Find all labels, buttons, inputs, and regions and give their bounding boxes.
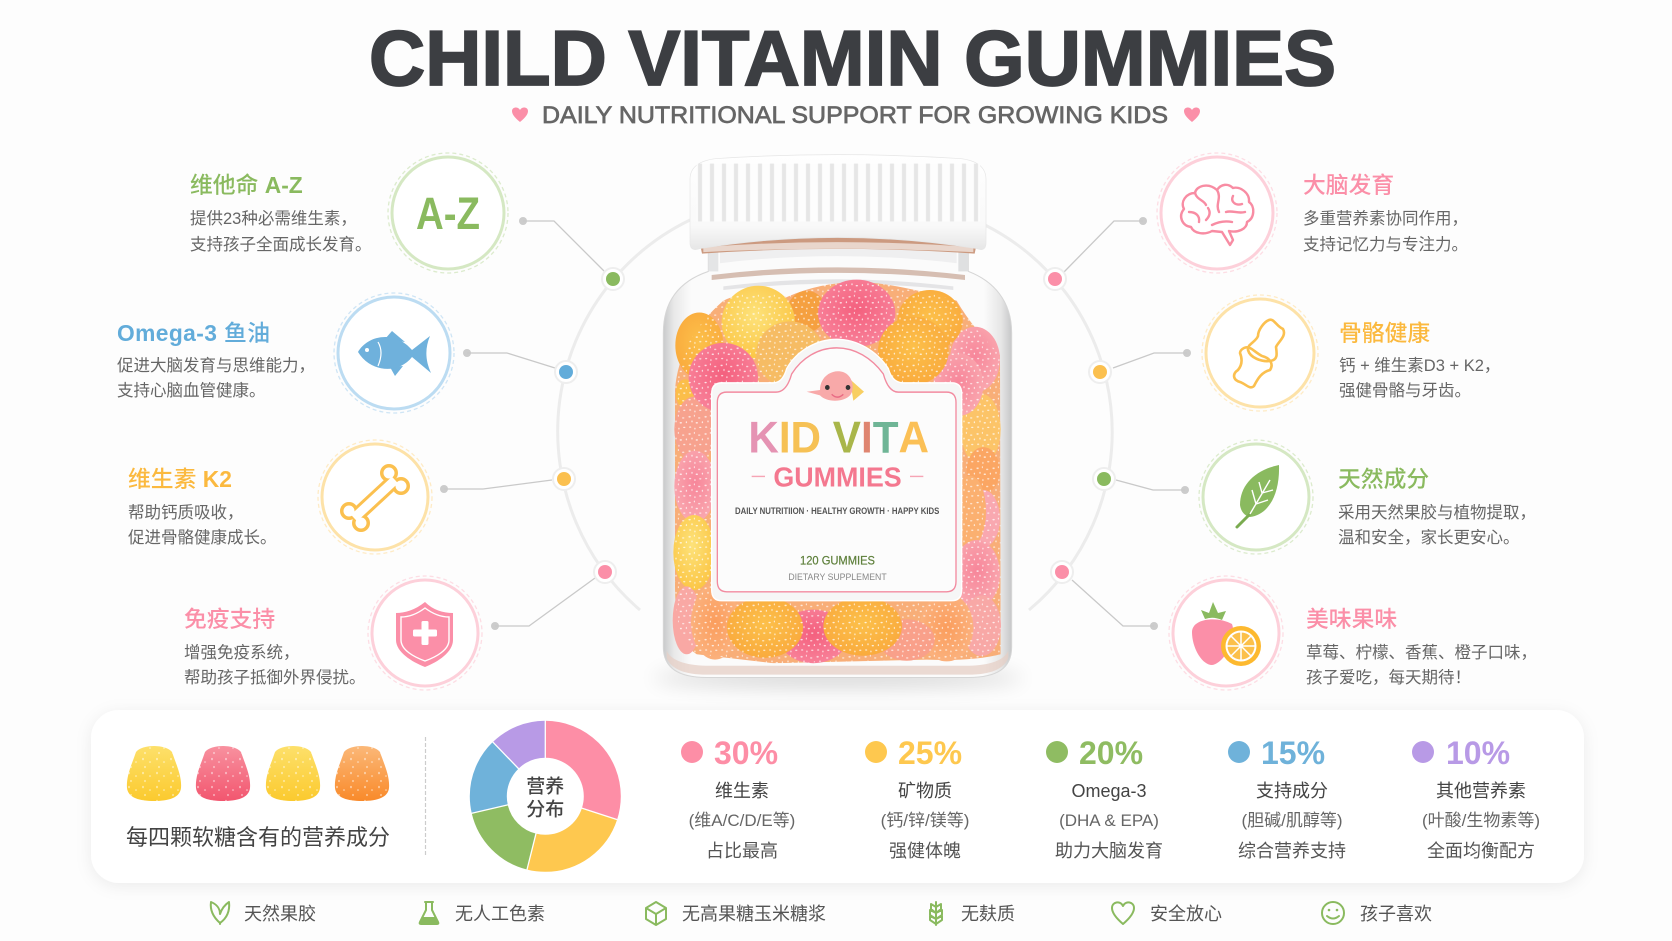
badge	[388, 153, 508, 273]
badge	[1199, 440, 1313, 554]
icon: bone	[340, 464, 410, 532]
badge: safe: 安全放心	[1150, 904, 1222, 924]
description: 孩子爱吃，每天期待！	[1306, 668, 1471, 687]
badge: gluten free	[930, 902, 1015, 925]
description: 采用天然果胶与植物提取，	[1338, 503, 1536, 522]
description: 增强免疫系统，	[184, 643, 300, 662]
badge: safe	[1112, 902, 1222, 924]
icon: strawberry and orange	[1192, 602, 1261, 666]
description: 支持心脑血管健康。	[117, 381, 266, 400]
badge	[334, 293, 454, 413]
feature: immune support	[184, 561, 616, 690]
stat: 10% other	[1412, 735, 1540, 861]
badge: no artificial colours	[420, 902, 545, 924]
stat: 25% minerals	[865, 735, 969, 861]
description	[1339, 356, 1500, 400]
badge: natural pectin: 天然果胶	[244, 904, 316, 924]
description: 温和安全，家长更安心。	[1338, 528, 1520, 547]
label tagline: DAILY NUTRITIION · HEALTHY GROWTH · HAPPY KIDS	[735, 506, 939, 516]
stat: 10% other: 其他营养素	[1436, 781, 1526, 801]
label count: 120 GUMMIES	[800, 554, 875, 568]
stat: 25% minerals: 矿物质	[898, 781, 952, 801]
label supplement: DIETARY SUPPLEMENT	[788, 572, 887, 582]
stat: 20% omega-3: (DHA & EPA)	[1059, 811, 1159, 830]
stat: 30% vitamins: 维生素	[715, 781, 769, 801]
donut chart: 分布	[526, 798, 564, 820]
left arc	[558, 220, 690, 610]
heading: 维生素 K2	[128, 466, 232, 492]
label brand name: KID VITA	[748, 413, 929, 463]
stat: 30% vitamins	[681, 735, 795, 861]
badge: gluten free: 无麸质	[961, 904, 1015, 924]
connector	[1051, 561, 1158, 630]
jar illustration	[663, 155, 1012, 677]
badge: kids love it	[1322, 902, 1432, 924]
description: 支持记忆力与专注力。	[1303, 235, 1468, 254]
stat: 25% minerals: 25%	[898, 735, 962, 771]
icon: leaf	[1237, 465, 1279, 527]
description	[117, 356, 315, 400]
badge: no high fructose corn syrup: 无高果糖玉米糖浆	[682, 904, 826, 924]
jar shadow	[653, 669, 1023, 687]
caption: 每四颗软糖含有的营养成分	[126, 825, 390, 850]
donut chart: 营养	[526, 775, 564, 797]
gummies inside jar	[673, 279, 1002, 665]
right arc	[985, 225, 1112, 610]
stat: 20% omega-3: 助力大脑发育	[1055, 841, 1163, 861]
badge	[1202, 295, 1318, 411]
description	[1338, 503, 1536, 547]
description: 强健骨骼与牙齿。	[1339, 381, 1471, 400]
four gummies	[127, 746, 389, 801]
stat: 25% minerals: 强健体魄	[889, 841, 961, 861]
label	[712, 339, 962, 601]
label gummies: GUMMIES	[773, 462, 902, 493]
stat: 10% other: 10%	[1446, 735, 1510, 771]
badge: no artificial colours: 无人工色素	[455, 904, 545, 924]
description	[1306, 643, 1537, 687]
badge: no high fructose corn syrup	[646, 902, 826, 925]
stat: 30% vitamins: 占比最高	[706, 841, 778, 861]
description: 帮助孩子抵御外界侵扰。	[184, 668, 366, 687]
stat: 15% support	[1228, 735, 1346, 861]
stat: 20% omega-3	[1046, 735, 1163, 861]
title: CHILD VITAMIN GUMMIES	[369, 14, 1336, 102]
panel: nutrition distribution	[91, 710, 1584, 883]
connector	[1093, 468, 1189, 494]
heading: 天然成分	[1338, 466, 1429, 492]
connector	[463, 349, 577, 383]
heading: 大脑发育	[1303, 172, 1394, 198]
icon: shield	[396, 602, 453, 667]
description	[1303, 209, 1468, 254]
jar base reflection	[667, 651, 1008, 675]
badge: kids love it: 孩子喜欢	[1360, 904, 1432, 924]
stat: 10% other: 全面均衡配方	[1427, 841, 1535, 861]
description: 支持孩子全面成长发育。	[190, 235, 372, 254]
heading: 免疫支持	[184, 606, 275, 632]
footer badges	[211, 902, 1432, 925]
feature: vitamin K2	[128, 440, 575, 554]
heading: 美味果味	[1306, 606, 1397, 632]
heading: Omega-3 鱼油	[117, 320, 270, 346]
description: 提供23种必需维生素，	[190, 209, 357, 228]
label mascot	[807, 371, 864, 401]
badge: A-Z	[416, 188, 480, 239]
feature: fruity flavours	[1051, 561, 1537, 690]
description	[190, 209, 372, 254]
donut chart	[471, 720, 618, 870]
subtitle: DAILY NUTRITIONAL SUPPORT FOR GROWING KIDS	[542, 102, 1168, 129]
connector	[1089, 349, 1191, 383]
badge	[368, 576, 482, 690]
icon: joint bones	[1234, 320, 1284, 387]
connector	[440, 468, 575, 493]
neck reflections	[708, 247, 968, 290]
connector	[491, 561, 616, 630]
badge	[318, 440, 432, 554]
description: 钙 + 维生素D3 + K2，	[1339, 356, 1500, 375]
stat: 10% other: (叶酸/生物素等)	[1422, 811, 1540, 830]
description	[184, 643, 366, 687]
description: 草莓、柠檬、香蕉、橙子口味，	[1306, 643, 1537, 662]
connector	[1044, 217, 1147, 290]
badge	[1157, 153, 1277, 273]
stat: 30% vitamins: (维A/C/D/E等)	[689, 811, 795, 830]
feature: bone health	[1089, 295, 1500, 411]
icon: brain	[1181, 185, 1253, 245]
stat: 20% omega-3: 20%	[1079, 735, 1143, 771]
heading: 维他命 A-Z	[190, 172, 303, 198]
description: 促进骨骼健康成长。	[128, 528, 276, 547]
stat: 15% support: 综合营养支持	[1238, 841, 1346, 861]
icon: fish	[358, 331, 431, 376]
description: 多重营养素协同作用，	[1303, 209, 1468, 228]
description: 促进大脑发育与思维能力，	[117, 356, 315, 375]
jar cap	[690, 155, 986, 254]
description: 帮助钙质吸收，	[128, 503, 244, 522]
badge: natural pectin	[211, 902, 316, 924]
heading: 骨骼健康	[1339, 320, 1430, 346]
feature: omega-3	[117, 293, 577, 413]
stat: 15% support: 15%	[1261, 735, 1325, 771]
stat: 15% support: 支持成分	[1256, 781, 1328, 801]
description	[128, 503, 276, 547]
stat: 30% vitamins: 30%	[714, 735, 778, 771]
badge	[1169, 576, 1283, 690]
stat: 15% support: (胆碱/肌醇等)	[1241, 811, 1343, 830]
feature: brain development	[1044, 153, 1468, 290]
stat: 20% omega-3: Omega-3	[1071, 781, 1147, 801]
jar glass body	[663, 244, 1012, 677]
feature: vitamin A-Z	[190, 153, 624, 290]
stat: 25% minerals: (钙/锌/镁等)	[881, 811, 969, 830]
feature: natural ingredients	[1093, 440, 1536, 554]
connector	[519, 217, 624, 290]
